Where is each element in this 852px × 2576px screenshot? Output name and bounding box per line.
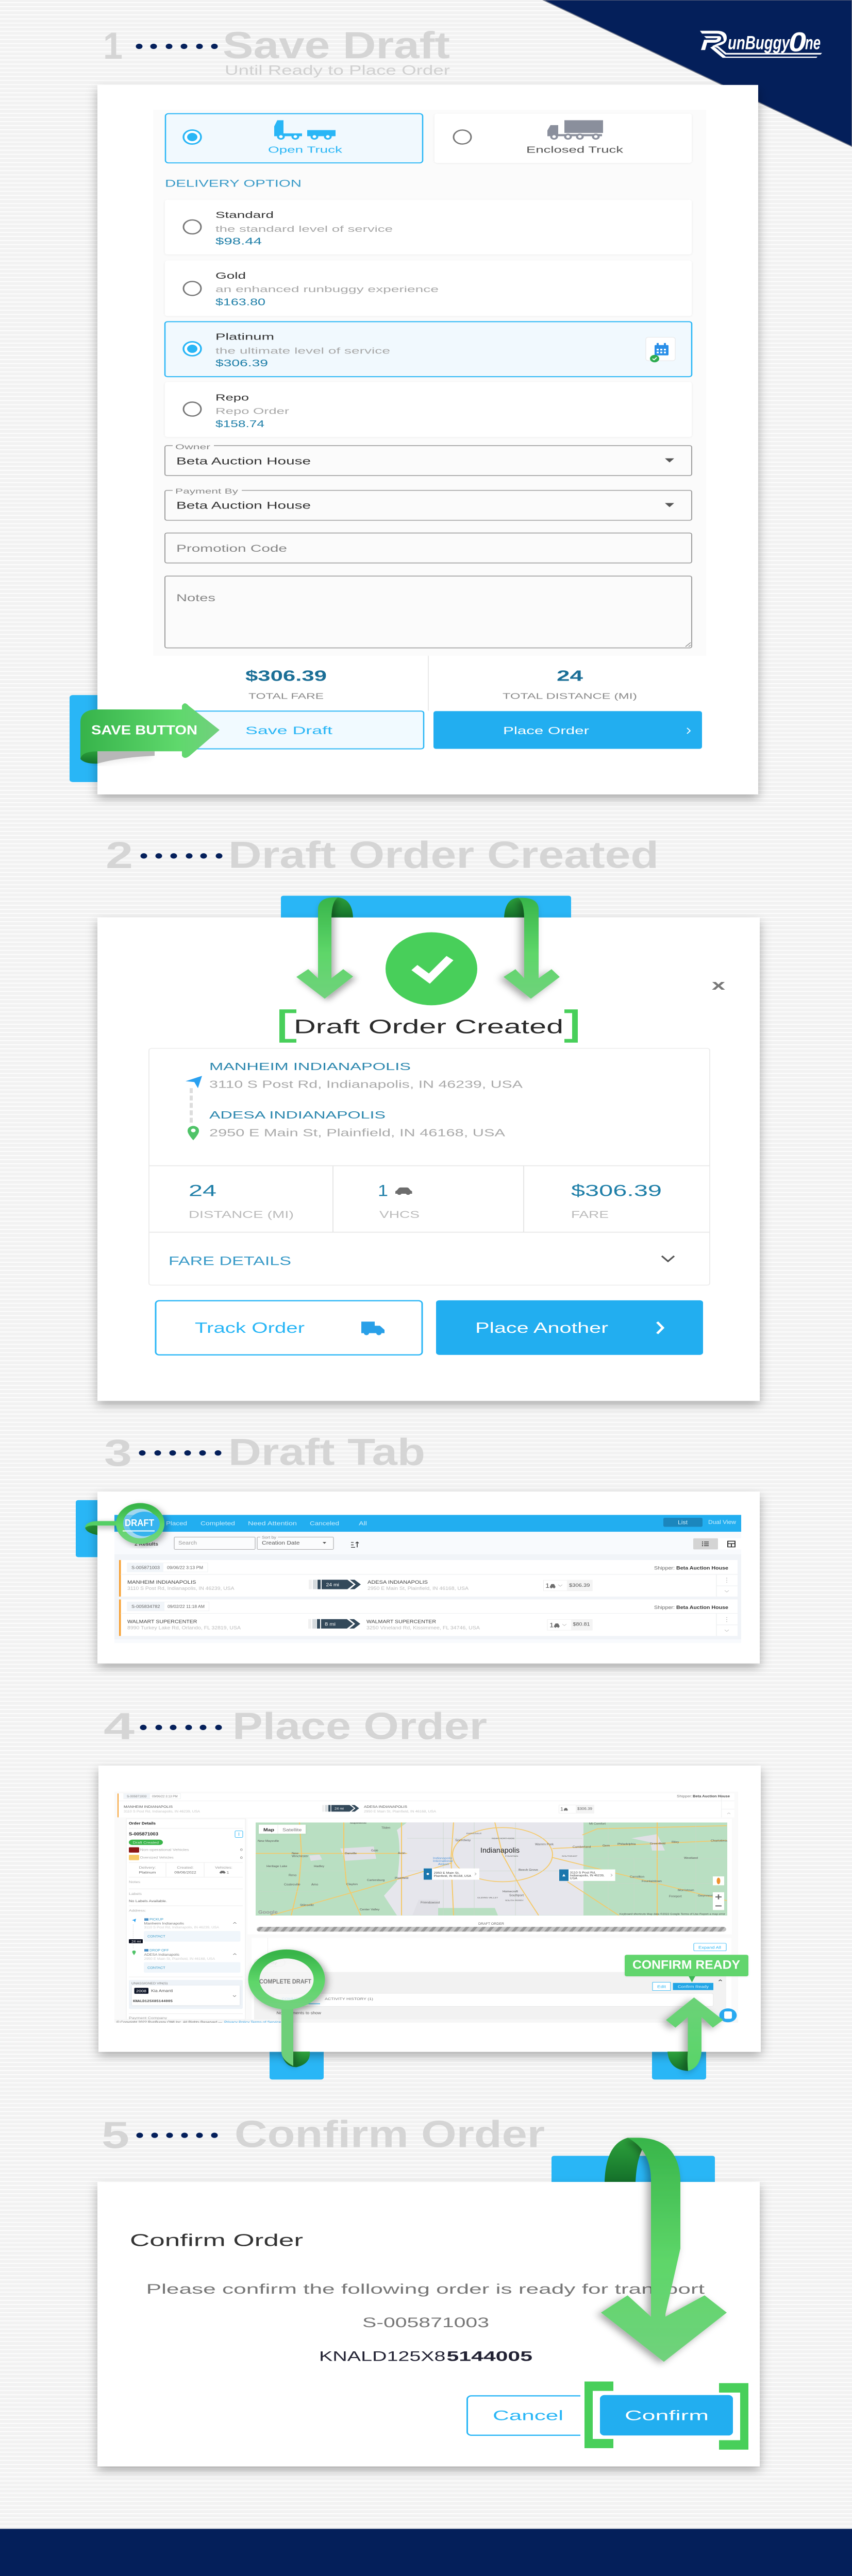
dialog message: Please confirm the following order is ready for transport [146,2281,705,2297]
order summary row: 09/06/22 3:13 PM [152,1795,178,1798]
arrow: up to confirm ready [666,1997,723,2071]
fare details row [169,1253,674,1268]
heading: step 3 draft tab [104,1431,425,1474]
map labels: Plainfield [395,1877,408,1880]
map labels: Stilesville [300,1904,314,1907]
map labels: Hadley [314,1865,324,1868]
stat: total distance: 24 [557,668,583,684]
option: standard: $98.44 [215,236,262,247]
order row: walmart to walmart: Shipper: [654,1605,675,1610]
stat: vehicles: VHCS [379,1209,420,1220]
button: place another [436,1300,703,1355]
field: owner: Beta Auction House [176,455,311,467]
order row: manheim to adesa: 09/06/22 3:13 PM [167,1566,203,1570]
stat: distance [189,1181,294,1220]
heading: step 5 confirm order: Confirm Order [235,2113,545,2156]
map labels: Westland [684,1857,698,1860]
panel: order detail page [98,1766,761,2052]
callout: confirm ready: CONFIRM READY [632,1958,740,1972]
order row: manheim to adesa: 2950 E Main St, Plainfield, IN 46168, USA [367,1586,469,1591]
order row: walmart to walmart: 8990 Turkey Lake Rd, Orlando, FL 32819, USA [127,1626,241,1631]
map labels: Friendswood [421,1902,440,1904]
unassigned vins [129,1980,243,2009]
nav bar tabs: Completed [201,1520,235,1527]
blue tab: step 4 left [270,2045,324,2079]
corner banner [543,0,852,146]
map marker: pickup: 3110 S Post Rd, [570,1871,596,1874]
stat: total distance [503,668,637,701]
option: repo: Repo Order [215,407,289,416]
order row: manheim to adesa: Beta Auction House [676,1566,728,1571]
map labels: Clayton [346,1883,358,1886]
heading: step 1 save draft: 1 [103,25,123,67]
callout: draft tab magnifier: DRAFT [125,1518,154,1528]
chat bubble [719,2008,737,2022]
panel: order details sidebar [126,1819,245,2020]
map labels: Homecroft [503,1891,518,1893]
order row: walmart to walmart [119,1599,738,1636]
button: save draft [170,711,424,749]
order row: walmart to walmart: WALMART SUPERCENTER [366,1620,436,1624]
stat: distance: 24 [189,1181,216,1200]
filters toolbar [135,1535,741,1549]
map labels: Gale [371,1850,378,1852]
callout: confirm ready [625,1955,748,1982]
button: track order [156,1301,422,1355]
address: pickup: CONTACT [147,1935,165,1939]
blue tab: step 2 [281,896,571,924]
map marker: pickup [559,1870,615,1881]
blue tab: step 4 right [652,2045,706,2079]
button: cancel [467,2396,601,2435]
filters toolbar: 2 Results [135,1542,158,1547]
map labels: Amo [311,1884,319,1886]
map labels: Tilden [381,1827,390,1829]
map labels: Freeport [669,1895,682,1898]
option: standard: Standard [215,210,274,220]
field: promotion code [165,533,692,563]
logo: RunBuggyOne: ne [805,32,821,54]
order row: walmart to walmart: 1 [549,1622,554,1629]
map labels: SOUTHEAST [562,1855,578,1857]
map labels: Riley [672,1841,679,1844]
map labels: Reno [289,1874,297,1877]
map labels: Greenfield [650,1842,665,1845]
field: promotion code: Promotion Code [176,543,287,554]
unassigned vins: Kia Amanti [151,1989,173,1993]
map labels: Danville [345,1853,357,1855]
label: delivery option: DELIVERY OPTION [165,178,302,189]
button: place order [433,711,702,749]
option: enclosed truck: Enclosed Truck [526,145,623,155]
nav bar tabs [114,1515,741,1532]
map labels: Airport [438,1862,449,1866]
stat: fare [571,1181,662,1220]
address: drop off: DROP OFF [149,1948,169,1952]
stat: distance: DISTANCE (MI) [189,1209,294,1220]
icon: success check [386,932,477,1005]
nav bar tabs: Canceled [310,1520,339,1527]
copyright footer: © Copyright 2022 RunBuggy OMI Inc. All Rights Reserved — [116,2020,223,2024]
heading: step 2 draft order created: 2 [106,834,133,876]
callout: draft tab magnifier [85,1506,161,1541]
button: place another: Place Another [475,1319,608,1336]
map labels: Warren Park [535,1843,554,1846]
map: indianapolis route: Keyboard shortcuts Map data ©2022 Google Terms of Use Report a map error [620,1912,725,1916]
order row: manheim to adesa: ADESA INDIANAPOLIS [367,1580,428,1585]
heading: step 3 draft tab: 3 [104,1432,132,1474]
map marker: drop off [424,1869,479,1879]
status progress bar [257,1923,726,1931]
map labels: Center Valley [360,1909,380,1911]
option: repo [165,382,692,437]
map labels: Indianapolis [433,1857,452,1860]
filters toolbar: Search [178,1540,197,1546]
option: standard [165,200,692,255]
heading: step 4 place order: Place Order [232,1705,487,1747]
map labels: Speedway [455,1839,471,1842]
map labels: Mt Comfort [589,1823,606,1825]
panel: order details sidebar: Order Details [129,1822,156,1825]
stat: total fare: $306.39 [245,668,327,684]
field: owner [165,443,692,476]
dialog message: 5144005 [446,2348,532,2364]
title: draft order created: Draft Order Created [294,1016,563,1038]
map labels: NEAR NORTHSIDE [492,1837,514,1839]
map labels: Fountaintown [642,1880,662,1883]
order row: manheim to adesa: Shipper: [654,1566,675,1571]
map labels: EAGLEDALE [466,1833,482,1835]
nav bar tabs: Need Attention [248,1520,297,1527]
map: indianapolis route: Indianapolis [480,1846,520,1854]
filters toolbar: Creation Date [262,1540,300,1546]
route: pickup and drop off: ADESA INDIANAPOLIS [209,1109,386,1121]
route: pickup and drop off: MANHEIM INDIANAPOLIS [209,1061,411,1072]
map labels: Cumberland [573,1846,591,1849]
map labels: Carrollton [630,1876,644,1878]
order row: walmart to walmart: S-005834782 [131,1604,160,1609]
stat: vehicles [378,1181,420,1220]
option: platinum selected: Platinum [215,332,274,342]
button: save draft: Save Draft [245,724,332,737]
panel: order details sidebar: 09/06/2022 [174,1870,196,1874]
address: drop off [132,1948,240,1973]
option: platinum selected [165,321,692,377]
unassigned vins: UNASSIGNED VIN(S) [131,1982,168,1985]
map labels: New [292,1853,299,1855]
field: payment by [165,488,692,520]
address: pickup: PICKUP [149,1917,163,1921]
option: platinum selected: the ultimate level of service [215,346,390,356]
map labels: Beech Grove [519,1869,538,1872]
blue tab: step 1 [70,695,106,782]
order row: manheim to adesa: 24 mi [326,1582,339,1588]
panel: save draft form [97,85,758,794]
copyright footer: Privacy Policy Terms of Service [224,2020,281,2024]
route: pickup and drop off [186,1061,523,1140]
address: pickup: 3110 S Post Rd, Indianapolis, IN 46239, USA [144,1926,220,1929]
panel: order details sidebar: Created: [177,1866,194,1870]
panel: comments and actions: day [269,1960,277,1965]
order summary row: 1 [560,1807,564,1812]
map marker: pickup: Indianapolis, IN 46239, [570,1874,605,1877]
logo: RunBuggyOne [700,27,822,58]
panel: order details sidebar: Vehicles: [215,1866,232,1870]
arrow fold: right loop [504,898,524,918]
dialog message: S-005871003 [362,2314,489,2330]
icon: calendar [646,337,675,362]
address: pickup: Manheim Indianapolis [144,1921,184,1925]
map labels: Coatesville [284,1884,300,1886]
field: payment by: Beta Auction House [176,500,311,511]
panel: order details sidebar: Payment Company [129,2016,167,2020]
order summary row [118,1793,734,1817]
arrow: down to confirm button [601,2138,727,2362]
order row: walmart to walmart: 3250 Vineland Rd, Kissimmee, FL 34746, USA [366,1626,480,1631]
button: confirm: Confirm [625,2408,709,2424]
dialog message [146,2281,705,2364]
heading: step 5 confirm order: 5 [102,2114,129,2156]
unassigned vins: KNALD125X85144005 [133,1999,173,2003]
address: drop off: 2950 E Main St, Plainfield, IN 46168, USA [144,1957,215,1961]
panel: comments and actions: No comments to show [276,2011,321,2015]
nav bar tabs: Dual View [708,1519,737,1526]
button: confirm [600,2395,733,2435]
nav bar tabs: All [359,1520,367,1527]
order row: manheim to adesa [119,1560,738,1597]
route: pickup and drop off: 3110 S Post Rd, Indianapolis, IN 46239, USA [209,1078,523,1090]
panel: order details sidebar: Platinum [139,1870,156,1874]
field: notes [165,576,692,648]
map labels: Winchester [292,1855,308,1858]
dialog title: Confirm Order [130,2231,303,2250]
map type toggle: Map [263,1827,274,1833]
field: payment by: Payment By [175,488,238,496]
order row: walmart to walmart: 09/02/22 11:18 AM [168,1604,205,1609]
heading: step 4 place order [104,1705,487,1748]
filters toolbar: Sort by [262,1535,277,1539]
stat: total distance: TOTAL DISTANCE (MI) [503,691,637,701]
arrow: save button callout: SAVE BUTTON [91,723,197,737]
nav bar tabs: List [678,1519,688,1526]
map type toggle: Satellite [282,1827,302,1833]
order summary row: MANHEIM INDIANAPOLIS [124,1805,173,1809]
order summary row: Beta Auction House [693,1794,730,1798]
map: indianapolis route [256,1822,727,1916]
option: gold: Gold [215,271,246,281]
order summary row: 2950 E Main St, Plainfield, IN 46168, USA [364,1809,436,1814]
route: pickup and drop off: 2950 E Main St, Plainfield, IN 46168, USA [209,1127,505,1139]
panel: order details sidebar: Notes [129,1880,140,1884]
stat: fare: $306.39 [571,1181,662,1200]
panel: draft order created dialog [97,918,760,1401]
map marker: drop off: Plainfield, IN 46168, USA [434,1874,472,1878]
map labels: Gem [603,1844,610,1848]
map labels: New Maysville [258,1840,279,1843]
address: drop off: CONTACT [147,1965,165,1970]
arrow: right down to success check [504,898,560,999]
map type toggle [259,1825,306,1834]
heading: step 5 confirm order [102,2113,545,2156]
button: cancel: Cancel [493,2408,563,2424]
map labels: Gwynneville [698,1895,716,1897]
status pill: draft created [129,1840,163,1845]
map labels: Cartersburg [367,1879,385,1882]
status pill: draft created: Draft Created [133,1840,159,1844]
order row: walmart to walmart: WALMART SUPERCENTER [127,1620,197,1624]
heading: step 4 place order: 4 [104,1705,135,1748]
field: owner: Owner [175,444,210,451]
panel: comments and actions [252,1938,731,2023]
heading: step 1 save draft [103,24,450,78]
map labels: Philadelphia [617,1843,636,1846]
map labels: FOUNTAIN [505,1855,518,1857]
stat: vehicles: 1 [378,1181,388,1200]
address: pickup [132,1917,240,1942]
distance chip: 24 mi: 24 mi [131,1940,141,1943]
option: enclosed truck [435,114,692,163]
panel: comments and actions: Edit [657,1985,666,1989]
option: gold: $163.80 [215,297,265,308]
panel: order details sidebar: Delivery: [139,1866,156,1870]
logo: RunBuggyOne: unBuggy [728,32,790,54]
stat: total fare: TOTAL FARE [248,691,324,701]
order row: manheim to adesa: MANHEIM INDIANAPOLIS [127,1580,196,1585]
callout: complete draft magnifier: COMPLETE DRAFT [259,1977,311,1985]
map controls [713,1876,724,1910]
order row: walmart to walmart: $80.81 [573,1622,590,1627]
order row: walmart to walmart: Beta Auction House [676,1605,728,1610]
order summary row: S-005871003 [127,1795,147,1798]
panel: comments and actions: Confirm Ready [678,1985,709,1989]
map labels: Google [258,1910,278,1915]
blue tab: step 5 [552,2156,715,2189]
arrow: save button callout [80,703,220,764]
stat: total fare [245,668,327,701]
arrow fold: left loop [331,897,353,918]
close x: x [712,976,725,993]
panel: order details sidebar: 1 [227,1870,229,1874]
title: draft order created [279,1009,578,1043]
map labels: Heritage Lake [266,1865,287,1868]
option: open truck: Open Truck [268,145,342,155]
map marker: pickup: USA [570,1877,578,1880]
panel: order details sidebar: Oversized Vehicles [140,1855,174,1859]
details box [149,1048,710,1285]
arrow fold: step 5 loop [605,2138,649,2182]
panel: comments and actions: COMMENTS [281,1997,307,2001]
order row: manheim to adesa: 3110 S Post Rd, Indianapolis, IN 46239, USA [127,1586,235,1591]
map labels: Morristown [678,1889,694,1892]
map marker: drop off: 2950 E Main St, [434,1872,460,1875]
map labels [258,1822,728,1915]
panel: confirm order dialog [97,2182,760,2466]
option: standard: the standard level of service [215,225,393,234]
callout: complete draft magnifier [254,1954,320,2067]
unassigned vins: 2008 [136,1989,147,1993]
panel: order details sidebar: S-005871003 [129,1832,158,1836]
order summary row: $306.39 [577,1807,592,1811]
status progress bar: DRAFT ORDER [478,1923,504,1926]
distance chip: 24 mi [129,1939,143,1943]
heading: step 1 save draft: Save Draft [223,24,450,66]
panel: order details sidebar: Labels [129,1892,142,1896]
map labels: International [433,1860,453,1863]
option: repo: $158.74 [215,419,264,429]
order row: manheim to adesa: 1 [545,1583,549,1589]
dialog message: KNALD125X8 [319,2348,446,2364]
panel: order details sidebar: Address: [129,1908,146,1912]
copyright footer [114,2020,738,2024]
heading: step 3 draft tab: Draft Tab [228,1431,425,1473]
panel: comments and actions: ACTIVITY HISTORY (1) [325,1997,374,2001]
button: place order: Place Order [503,725,590,736]
option: gold [165,261,692,316]
option: open truck [165,114,423,163]
nav bar tabs: Placed [166,1520,187,1527]
order summary row: ADESA INDIANAPOLIS [364,1805,407,1809]
panel: order details sidebar: 0 [240,1856,243,1860]
option: repo: Repo [215,393,249,403]
arrow: left down to success check [296,897,353,999]
panel: comments and actions: Expand All [698,1945,721,1950]
panel: order details sidebar: 0 [240,1848,243,1852]
map labels: SOUTH PERRY [505,1899,524,1902]
option: platinum selected: $306.39 [215,358,268,369]
heading: step 2 draft order created: Draft Order Created [228,834,659,876]
map labels: Charlottesv [711,1840,728,1842]
map labels: Southport [509,1894,524,1897]
map labels: Mapewood [350,1822,366,1825]
heading: step 1 save draft: Until Ready to Place Order [225,63,450,78]
panel: order details sidebar: Non-operational Vehicles [140,1848,189,1852]
panel: order details sidebar: No Labels Available. [129,1899,167,1903]
order summary row: Shipper: [677,1794,692,1798]
highlight brackets [584,2381,748,2450]
blue tab: step 3 [76,1500,107,1557]
footer band [0,2529,852,2576]
logo: RunBuggyOne: 0 [789,27,806,57]
button: track order: Track Order [195,1319,305,1336]
address: drop off: ADESA Indianapolis [144,1953,179,1957]
field: notes: Notes [176,592,215,603]
order row: walmart to walmart: 8 mi [325,1622,336,1627]
order summary row: 24 mi [335,1806,344,1810]
order row: manheim to adesa: S-005871003 [131,1566,160,1570]
panel: draft tab orders list [97,1492,760,1664]
map labels: GLENNS VALLEY [477,1896,498,1899]
stat: fare: FARE [571,1209,609,1220]
order summary row: 3110 S Post Rd, Indianapolis, IN 46239, USA [124,1809,200,1814]
fare details row: FARE DETAILS [169,1253,291,1268]
order row: manheim to adesa: $306.39 [569,1583,590,1588]
map labels: Avon [398,1852,406,1855]
option: gold: an enhanced runbuggy experience [215,285,439,294]
